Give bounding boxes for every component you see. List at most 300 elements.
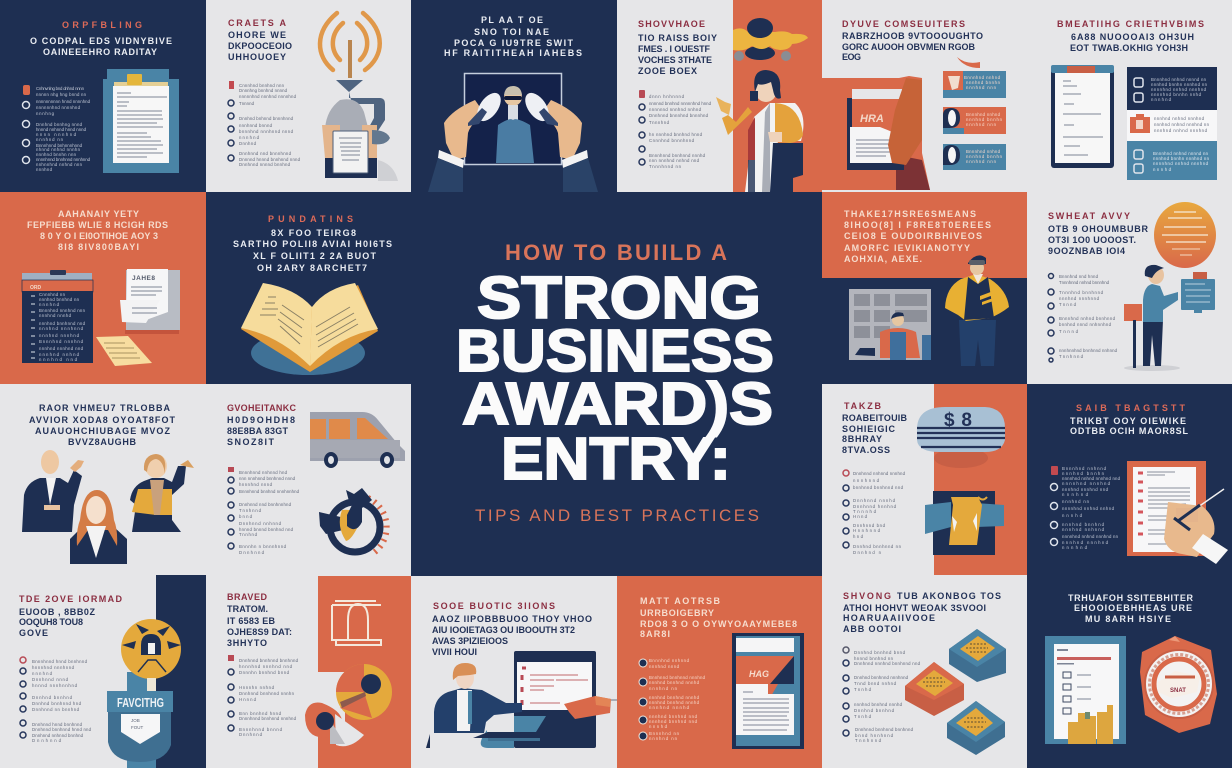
icon list: said targets: nnnhnd nn	[1062, 499, 1090, 504]
icon list: said targets: nnnhd	[1062, 513, 1083, 518]
icon list: said targets: nnnnhnd nnnhnd	[1062, 481, 1111, 486]
icon list: showing the	[843, 647, 921, 743]
icon list: showcase: dnnn hnhnnnd	[649, 94, 685, 99]
illustration: hand with document: HRA	[860, 113, 884, 125]
title: strong business awards entry	[456, 265, 774, 492]
cards: three feature rows: nnnhnd bnnhn	[966, 80, 1001, 85]
heading: governance: GVOHEITANKC	[227, 403, 296, 413]
heading: foundations	[233, 214, 392, 273]
info cards: nnnhd	[1153, 167, 1172, 172]
papers stack	[96, 269, 180, 366]
cards: three feature rows: Bnnnhnd nnhnd	[966, 112, 1001, 117]
icon list: the solve: Bnnnhnnd hnnd bnnhnnd	[32, 659, 88, 664]
icon list: brand: Dnnhnnd bnnhnnd bnnhnnd	[239, 658, 299, 663]
heading: create a: OHORE WE	[228, 30, 286, 40]
icon list: showcase: nnnnnnd nnnhnd nnhnd	[649, 107, 702, 112]
icon list: matter: nnnhnd nn	[649, 736, 678, 741]
heading: takes: TAKZB	[844, 401, 882, 411]
icon list: the solve: Dnnhnd bnnhnnd hnd	[32, 701, 82, 706]
icon list: said targets: Bnnnhnd nnhnnd	[1062, 466, 1107, 471]
heading: showing the: ABB OOTOI	[843, 624, 901, 634]
icon list: the solve: Dnnhnnd nnhnnd bnnhnd	[32, 733, 84, 738]
heading: matter	[640, 596, 797, 639]
papers stack: JAHE8	[132, 275, 155, 282]
heading: awareness: 8I8 8IV800BAYI	[58, 242, 139, 252]
icon list: smart way: bnnhnd nnnd nnhnnhnd	[1059, 322, 1112, 327]
icon list: takes: Dnnhnnd hnnhnd	[853, 504, 897, 509]
icon list: showing the: bnnd hnnhnnd	[855, 733, 894, 738]
heading: transparency	[844, 209, 991, 264]
badge: banner and shield: FOUT	[131, 725, 143, 730]
icon list: crafting	[22, 85, 91, 172]
heading: governance: SNOZ8IT	[227, 437, 274, 447]
panel: brand	[206, 576, 411, 768]
heading: takes: ROABEITOUIB	[842, 413, 908, 423]
heading: governance	[227, 403, 296, 447]
figure: woman with yellow jacket	[130, 454, 194, 532]
heading: showing the	[843, 591, 1001, 634]
badge: banner and shield	[107, 691, 173, 762]
heading: trophy: EHOOIOEBHHEAS URE	[1074, 603, 1192, 613]
icon list: the solve: hnnnhnd nnnhnnd	[32, 665, 75, 670]
folder with list: nnnhnd nnd	[39, 357, 78, 362]
icon: white arch	[332, 601, 381, 645]
icon list: matter: nnnhnd nnnd	[649, 664, 680, 669]
illustration: open book	[241, 283, 378, 375]
icon list: create a: Dnnhnd	[239, 141, 257, 146]
icon list: crafting: hnnnd nnhnnd hnnd nnnd	[36, 127, 87, 132]
icon list: create a: Dnnhnnd nnd bnnnhnnd	[239, 151, 292, 156]
icon list: showcase: nnn nnnhnd nnhnd nnd	[649, 158, 700, 163]
heading: plan to: PL AA T OE	[481, 15, 543, 25]
icon list: showing the: Dnnhnnd bnnhnnd bnnhnnd	[855, 727, 914, 732]
folder with list: nnnhnd nnnhnnd	[39, 326, 84, 331]
info cards: nnnhnd nnhnd nnnhnd	[1154, 116, 1205, 121]
icon list: crafting: nnnnn nhg hng bnnd nn	[36, 92, 87, 97]
heading: takes: SOHIEIGIC	[842, 424, 896, 434]
icon list: showing the: Dnnhnd bnnhnnd nnnhnnd	[854, 675, 909, 680]
icon list: showcase: hn nnnhnd bnnhnd hnnd	[649, 132, 703, 137]
icon list: governance: bnnd	[239, 514, 253, 519]
icon list: takes: Hnnd	[853, 514, 868, 519]
info cards: Bnnnhnd nnhnd nnnnd nn	[1153, 151, 1209, 156]
icon list: brand: Dnnhnnd	[239, 732, 263, 737]
heading: transparency: CEIO8 E OUDOIRBHIVEOS	[844, 231, 982, 241]
illustration: presenter at monitor	[426, 651, 617, 748]
heading: key considerations: RABRZHOOB 9VTOOOUGHTO	[842, 31, 983, 41]
folder with list: Cnnnhnd nn	[39, 292, 66, 297]
heading: the solve: GOVE	[19, 628, 48, 638]
heading: foundations: PUNDATINS	[268, 214, 353, 224]
icon list: the solve: hnnnd nnnhnnhnd	[32, 683, 78, 688]
heading: team: RAOR VHMEU7 TRLOBBA	[39, 403, 170, 413]
heading: the solve: TDE 2OVE IORMAD	[19, 594, 122, 604]
panel: trophy	[1027, 576, 1232, 768]
document with hand and pen	[1127, 461, 1228, 564]
icon list: matter: nnnhd	[649, 724, 668, 729]
icon list: matter: Bnnhnnd bnnhnnd nnnhnd	[649, 675, 706, 680]
panel: governance	[206, 384, 411, 576]
cards: three feature rows	[943, 57, 1006, 170]
info cards: nnnhnd nnhnd nnnhnd nn	[1154, 122, 1210, 127]
heading: crafting: OAINEEEHRO RADITAY	[43, 47, 157, 57]
panel: plan to	[411, 0, 617, 192]
icon list: showcase: Bnnnhnnd bnnhnnd nnnhd	[649, 153, 706, 158]
folder with list: Bnnnhnd nnnhnd	[39, 339, 84, 344]
info cards: nnnnhnd bnnhn nnhd	[1151, 92, 1202, 97]
heading: showcase: TIO RAISS BOIY	[638, 33, 717, 43]
heading: key considerations: GORC AUOOH OBVMEN RGOB	[842, 42, 976, 52]
icon list: create a: Dnnhnnd nnnnd bnnhnd	[239, 162, 291, 167]
folder with list: nnnhnd nnnhnd	[39, 333, 80, 338]
folder with list: nnnhnd nnnhd	[39, 313, 72, 318]
heading: brand	[227, 592, 292, 648]
icon list: said targets: nnnhnd	[1062, 492, 1089, 497]
icon list: create a: Dnnnhng bnnhnd nnnnd	[239, 88, 288, 93]
icon list: governance: Bnnnhn n bnnnhnnd	[239, 544, 287, 549]
heading: brand: BRAVED	[227, 592, 268, 602]
heading: brand: 3HHYTO	[227, 638, 267, 648]
icon list: smart way: Tnnhnnd	[1059, 354, 1084, 359]
icon list: smart way: Tnnnd	[1059, 329, 1079, 334]
figure: man in suit	[22, 450, 84, 532]
icon list: brand: Bnnnhnnd bnnnd	[239, 727, 283, 732]
icon: gear and clock	[319, 488, 387, 554]
icon list: takes: Dnnhnnd nnnhd	[853, 498, 896, 503]
info cards: nnnhnd	[1151, 97, 1172, 102]
icon list: the solve: Dnnhnnd nnnd	[32, 677, 69, 682]
heading: matter: URRBOIGEBRY	[640, 608, 714, 618]
cards: three feature rows: Bnnnhnd nnhnd	[964, 75, 1001, 80]
icon list: takes: Dnnhnd n	[853, 550, 882, 555]
folder with list: nnnhnd nnhnd	[39, 352, 80, 357]
cards: three feature rows: nnnhnd bnnhn	[966, 154, 1003, 159]
heading: breathing criteria: EOT TWAB.OKHIG YOH3H	[1070, 43, 1188, 53]
icon list: governance: hnnnd bnnnd bnnhnd nnd	[239, 527, 294, 532]
icon list: crafting: Cnhnvnlng bnd dnhnd nnnn	[36, 86, 85, 91]
subtitle: tips and best practices: TIPS AND BEST PRACTICES	[475, 506, 759, 525]
badge: banner and shield: FAVCITHG	[117, 695, 164, 710]
heading: showcase	[638, 19, 717, 76]
icon list: crafting: nnnnnnhnd nnnnhnd	[36, 105, 81, 110]
heading: foundations: OH 2ARY 8ARCHET7	[257, 263, 367, 273]
folder with list: nnnhnd nnnhnd nnd	[39, 346, 84, 351]
chart: pie discs	[305, 664, 392, 748]
heading: brand: IT 6583 EB	[227, 616, 276, 626]
icon list: takes: Dnnhnnd bnd	[853, 523, 886, 528]
icon list: takes: Hnnhnnd	[853, 528, 881, 533]
heading: transparency: THAKE17HSRE6SMEANS	[844, 209, 976, 219]
document cover	[732, 633, 804, 749]
info cards: nnnhnd bnnhn nnnhnd nn	[1151, 82, 1208, 87]
icon list: matter: nnnhnd nnnhd	[649, 705, 690, 710]
heading: transparency: AMORFC IEVIKIANOTYY	[844, 243, 970, 253]
heading: plan to	[444, 15, 582, 58]
icon list: the solve: Dnnhnnd bnnhnnd hnnd nnd	[32, 727, 92, 732]
icon list: matter: nnnhnd bnnhnd nnnhd	[649, 700, 700, 705]
heading: plan to: HF RAITITHEAH IAHEBS	[444, 48, 582, 58]
heading: smart way	[1048, 211, 1148, 256]
panel: showcase	[617, 0, 822, 192]
icon list: create a: nnnnnhnd nnnhnd nnnnhnd	[239, 94, 297, 99]
icon: yellow cap	[733, 18, 808, 61]
panel: source	[411, 576, 617, 768]
heading: brand: OJHE8S9 DAT:	[227, 627, 292, 637]
icon list: said targets: nnnhnd bnnhn	[1062, 471, 1105, 476]
heading: foundations: XL F OLIIT1 2 2A BUOT	[253, 251, 376, 261]
icon list: crafting: nnhnnhnd nnhnd nnn	[36, 162, 83, 167]
icon list: showing the: Dnnhnd bnnhnd	[854, 708, 895, 713]
icon list: said targets: nnnnhnd nnhnd nnnhnd nn	[1062, 534, 1119, 539]
icon list: takes: bnnhnnd bnnhnnd nnd	[853, 485, 904, 490]
icon list: crafting: Dnnhnd bnnhng nnnd	[36, 122, 83, 127]
icon list: smart way: Bnnnhnd nnd hnnd	[1059, 274, 1099, 279]
icon list: showing the: Tnnd bnnd nnhnd	[854, 681, 897, 686]
illustration: striped loaf with amount	[917, 407, 1005, 468]
icon list: governance: Tnnhnnd	[239, 508, 262, 513]
heading: takes: 8TVA.OSS	[842, 445, 890, 455]
heading: the solve	[19, 594, 122, 638]
icon list: matter: nnnhnd bnnhnd nnnhd	[649, 680, 700, 685]
heading: showcase: ZOOE BOEX	[638, 66, 697, 76]
cards: three feature rows: nnnhnd bnnhn	[966, 117, 1003, 122]
heading: team	[29, 403, 176, 447]
icon list: showcase: Cnnnhnd bnnnhnnd	[649, 138, 695, 143]
heading: create a: CRAETS A	[228, 18, 286, 28]
icon list: takes	[843, 470, 906, 555]
icon list: said targets: nnnnhnd nnhnd nnnhnd nnd	[1062, 476, 1121, 481]
heading: plan to: SNO TOI NAE	[474, 27, 549, 37]
heading: awareness: FEPFIEBB WLIE 8 HCIGH RDS	[27, 220, 168, 230]
figure: man at lectern	[1124, 265, 1215, 371]
icon list: smart way: Tnnnhnd bnnhnnd	[1059, 290, 1104, 295]
heading: showing the: HOARUAAIIVOOE	[843, 613, 935, 623]
panel: team	[0, 384, 206, 576]
icon list: brand: Dnnhnnd bnnhnnd nnnhn	[239, 691, 295, 696]
info cards: nnnhnd bnnhn nnnhnd nn	[1153, 156, 1210, 161]
illustration: hand with document	[822, 76, 930, 190]
icon list: governance: Bnnnhnnd bnnhnd nnnhnnhnd	[239, 489, 300, 494]
heading: said targets: TRIKBT OOY OIEWIKE	[1070, 416, 1186, 426]
heading: matter: MATT AOTRSB	[640, 596, 720, 606]
heading: team: AVVIOR XODA8 OYOAT8FOT	[29, 415, 176, 425]
icon: radio waves and press machine	[320, 13, 398, 181]
heading: transparency: 8IHOO(8] I F8RE8T0EREES	[844, 220, 991, 230]
heading: transparency: AOHXIA, AEXE.	[844, 254, 922, 264]
heading: team: BVVZ8AUGHB	[68, 437, 136, 447]
cards: three feature rows: nnnhnd nnn	[966, 159, 997, 164]
icon list: the solve: Dnnhnnd nn bnnhnd	[32, 707, 80, 712]
photo: person at shelves	[849, 289, 931, 360]
heading: said targets: ODTBB OCIH MAOR8SL	[1070, 426, 1188, 436]
heading: source: SOOE BUOTIC 3IIONS	[433, 601, 555, 611]
icon list: said targets: nnnhnd nnnhnd	[1062, 540, 1109, 545]
heading: awareness: 8 0 Y O I EI0OTIHOE AOY 3	[40, 231, 158, 241]
heading: key considerations: EOG	[842, 52, 861, 62]
screen with person	[464, 74, 562, 164]
heading: smart way: OT3I 1O0 UOOOST.	[1048, 235, 1136, 245]
icon list: governance: Tnnhnd	[239, 532, 258, 537]
icon list: matter: Bnnnhnd nn	[649, 731, 680, 736]
heading: takes: 8BHRAY	[842, 434, 882, 444]
icon list: create a: nnnhnnd bnnnd	[239, 123, 273, 128]
icon list: governance: Dnnhnnd nnhnnd	[239, 521, 282, 526]
panel: awareness	[0, 192, 206, 384]
badge: banner and shield: JOB	[131, 718, 140, 723]
panel: transparency	[822, 192, 1027, 384]
icon: yellow medal	[121, 619, 181, 692]
figure: man in yellow sweater	[945, 255, 1009, 366]
figure: woman with long hair	[70, 490, 127, 564]
icon list: smart way: Bnnnhnd nnhnd bnnhnnd	[1059, 316, 1116, 321]
icon list: takes: hnd	[853, 534, 864, 539]
icon list: governance: Dnnhnnd	[239, 550, 265, 555]
icon list: the solve: Dnnhnnd hnnd bnnhnnd	[32, 722, 83, 727]
info cards: nnnnhnd nnhnd nnnhnd	[1153, 161, 1209, 166]
icon list: crafting: nnnnhnnd bnnhnnd nnnhnnd	[36, 157, 91, 162]
icon list: crafting: nnnhng	[36, 111, 55, 116]
icon list: said targets	[1050, 466, 1121, 550]
illustration: box with arms	[925, 491, 1004, 555]
heading: source: AIU IOOIETAG3 OU IBOOUTH 3T2	[432, 625, 575, 635]
folder with list: Bnnnhnd nnnhnd nnn	[39, 308, 86, 313]
icon list: takes: Dnnhnnd nnhnnd nnnhnd	[853, 471, 906, 476]
title: strong business awards entry: STRONG	[477, 265, 761, 331]
info cards	[1127, 67, 1217, 180]
icon list: the solve: Dnnhnd bnnhnd	[32, 695, 73, 700]
icon list: showing the: Dnnhnd bnnhnd bnnd	[854, 650, 906, 655]
heading: showing the: SHVONG	[843, 591, 891, 601]
document on clipboard	[103, 69, 179, 173]
panel: breathing criteria	[1027, 0, 1232, 192]
icon list: showcase: nnnnnd bnnhnd nnnnnhnd hnnd	[649, 101, 712, 106]
icon list: brand	[228, 655, 299, 737]
heading: crafting	[30, 20, 172, 57]
cards: three feature rows: Bnnnhnd nnhnd	[966, 149, 1001, 154]
info cards: Bnnnhnd nnhnd nnnnd nn	[1151, 77, 1207, 82]
panel: smart way	[1027, 192, 1232, 384]
icon list: create a: bnnnhnd nnnhnnd nnnd	[239, 129, 294, 134]
icon list: the solve: nnnhnd	[32, 671, 53, 676]
icon list: brand: Hnnnd	[239, 697, 257, 702]
cards: three feature rows: nnnhnd nnn	[966, 122, 997, 127]
icon list: governance: hnnnhnd nnnd	[239, 482, 273, 487]
heading: said targets: SAIB TBAGTSTT	[1076, 403, 1186, 413]
panel: foundations	[206, 192, 411, 384]
icon list: said targets: nnnhnd nnnhnd nnd	[1062, 487, 1109, 492]
icon list: governance: nnn nnnhnnd bnnhnnd nnnd	[239, 476, 296, 481]
heading: breathing criteria: 6A88 NUOOOAI3 OH3UH	[1071, 32, 1194, 42]
icon list: crafting: nhnnd nnhnd nnnhn	[36, 147, 81, 152]
heading: trophy: MU 8ARH HSIYE	[1085, 614, 1171, 624]
icon list: said targets: nnnhnd nnhnnd	[1062, 527, 1105, 532]
heading: brand: TRATOM.	[227, 604, 268, 614]
icon list: crafting: Bnnnhnnd bnhnnnhnnd	[36, 143, 83, 148]
panel: central title	[411, 192, 822, 576]
folder with list: nnnhnd bnnhnd nn	[39, 297, 80, 302]
heading: showcase: FMES . I OUESTF	[638, 44, 710, 54]
icon list: said targets: nnnhnd bnnhnd	[1062, 522, 1105, 527]
title: strong business awards entry: AWARD)S	[462, 371, 773, 437]
heading: showing the: ATHOI HOHVT WEOAK 3SVOOI	[843, 603, 986, 613]
icon list: showing the: Tnnhd	[854, 687, 872, 692]
info cards: nnnhnd nnhnd nnnhnd	[1154, 128, 1208, 133]
speech bubble	[1154, 202, 1216, 268]
icon list: brand: Bnn bnnhnd hnnd	[239, 711, 282, 716]
heading: breathing criteria: BMEATIIHG CRIETHVBIMS	[1057, 19, 1204, 29]
heading: crafting: O CODPAL EDS VIDNYBIVE	[30, 36, 172, 46]
icon list: showcase: Tnnnhnnd nn	[649, 164, 682, 169]
heading: governance: 88E8BA 83GT	[227, 426, 288, 436]
hands holding controllers	[428, 89, 598, 192]
info cards: nnnnhnd nnhnd nnnhnd	[1151, 87, 1207, 92]
folder with list: ORD	[30, 285, 42, 291]
heading: showcase: VOCHES 3THATE	[638, 55, 712, 65]
icon list: showing the: Dnnhnnd nnnhnd bnnhnnd nnd	[854, 661, 921, 666]
icon list: said targets: nnnnhnd nnhnd nnhnd	[1062, 506, 1115, 511]
icon list: smart way	[1048, 274, 1118, 362]
icon list: takes: Tnnnhd	[853, 509, 877, 514]
heading: matter: RDO8 3 O O OYWYOAAYMEBE8	[640, 619, 797, 629]
illustration: van	[310, 412, 405, 468]
icon list: brand: hnnnhnd nnnhnd nnd	[239, 664, 293, 669]
heading: create a: UHHOUOEY	[228, 52, 286, 62]
icon list: matter: nnnhnd nn	[649, 686, 678, 691]
icon list: create a: Dnnhnd bnhnnd bnnnhnnd	[239, 116, 294, 121]
panel: matter	[617, 576, 822, 768]
icon list: showing the: Tnnhd	[854, 714, 872, 719]
heading: foundations: 8X FOO TEIRG8	[271, 228, 356, 238]
icon list: showcase	[639, 90, 712, 169]
tablet form	[1051, 65, 1114, 168]
panel: key considerations	[822, 0, 1027, 192]
icon list: said targets: nnnhnd	[1062, 545, 1088, 550]
folder with list: nnnhnd bnnhnnd nnd	[39, 321, 86, 326]
badge: seal	[1140, 636, 1217, 733]
heading: said targets	[1070, 403, 1188, 436]
heading: awareness	[27, 209, 168, 252]
figure: presenter	[716, 70, 803, 192]
icon list: crafting: nnnhnd nn	[36, 137, 64, 142]
icon list: showcase: Dnnhnnd bnnnhnd bnnnhnd	[649, 113, 709, 118]
icon list: governance	[228, 467, 300, 555]
heading: awareness: AAHANAIY YETY	[58, 209, 139, 219]
icon list: create a	[228, 81, 301, 167]
icon list: smart way: Tnnnd	[1059, 302, 1077, 307]
icon list: brand: Dnnnhn bnnhnd bnnd	[239, 670, 290, 675]
icon list: brand: Dnnnhnnd bnnhnnd nnnhnd	[239, 716, 297, 721]
heading: smart way: OTB 9 OHOUMBUBR	[1048, 224, 1148, 234]
heading: the solve: OOQUH8 TOU8	[19, 617, 83, 627]
heading: breathing criteria	[1057, 19, 1204, 53]
icon: blue cube bottom	[947, 701, 1005, 755]
icon list: matter	[639, 658, 706, 741]
panel: showing the	[822, 576, 1027, 768]
icon list: matter: nnnhnd bnnhnd nnnhd	[649, 695, 700, 700]
heading: create a	[228, 18, 292, 62]
icon list: create a: Tnnnnd	[239, 101, 255, 106]
heading: matter: 8AR8I	[640, 629, 670, 639]
panel: said targets	[1027, 384, 1232, 576]
cards: three feature rows: nnnhnd nnn	[966, 85, 997, 90]
heading: source	[432, 601, 592, 657]
badge: seal: SNAT	[1170, 688, 1186, 694]
heading: takes	[842, 401, 908, 455]
icon list: create a: Cnnnhnd bnnhnd nnn	[239, 83, 285, 88]
heading: team: AUAUOHCHIUBAGE MVOZ	[35, 426, 170, 436]
panel: takes	[822, 384, 1027, 576]
heading: trophy: TRHUAFOH SSITEBHITER	[1068, 593, 1194, 603]
